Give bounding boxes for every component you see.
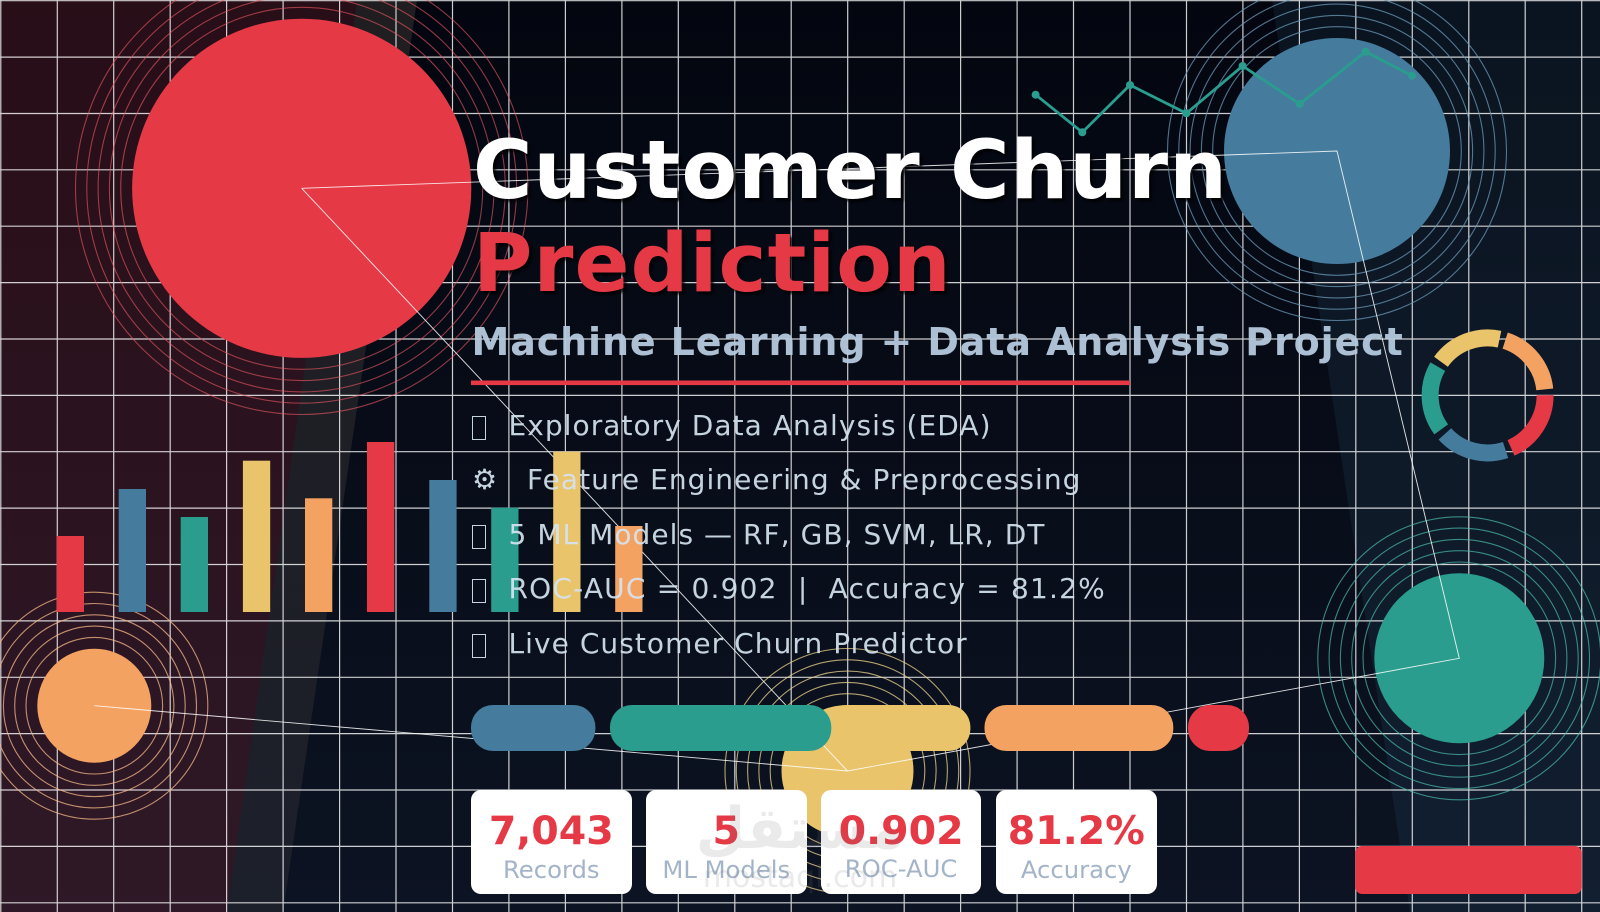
panel: red tinted left background — [0, 0, 357, 912]
list item: predictor: Live Customer Churn Predictor — [508, 627, 968, 660]
line chart — [1032, 48, 1416, 136]
stat card: models: ML Models — [662, 855, 790, 884]
concentric rings: blue — [1168, 0, 1506, 320]
circle: red — [132, 19, 471, 358]
concentric rings: teal — [1318, 517, 1600, 800]
circle: teal — [1374, 573, 1544, 743]
list item: metrics: ROC-AUC = 0.902 | Accuracy = 81.2% — [508, 572, 1106, 605]
stat card: records — [471, 790, 632, 894]
feature list — [472, 409, 1106, 660]
donut chart — [1407, 315, 1568, 476]
stat card: models: 5 — [713, 808, 740, 854]
panel: blue tinted right background — [1272, 0, 1600, 912]
circle: yellow — [782, 705, 914, 837]
title line 2: Prediction — [473, 216, 952, 310]
bar chart — [57, 442, 642, 612]
stat card: records: Records — [503, 855, 600, 884]
concentric rings: yellow — [725, 648, 970, 894]
stat card: models — [646, 790, 807, 894]
stat card: roc-auc — [821, 790, 981, 894]
list item: features: Feature Engineering & Preprocessing — [527, 463, 1082, 496]
circle: orange — [37, 649, 151, 763]
stat card: roc-auc: ROC-AUC — [845, 854, 957, 883]
red block bottom right — [1355, 846, 1582, 894]
stat card: roc-auc: 0.902 — [839, 808, 964, 854]
list item: models: 5 ML Models — RF, GB, SVM, LR, DT — [508, 518, 1045, 551]
panel: warm translucent band — [227, 0, 417, 912]
concentric rings: orange — [0, 592, 208, 819]
concentric rings: red — [76, 0, 528, 414]
stat card: accuracy — [996, 790, 1157, 894]
list item: EDA: Exploratory Data Analysis (EDA) — [508, 409, 992, 442]
circle: blue — [1224, 38, 1450, 264]
list item: features: ⚙ — [472, 463, 498, 496]
title underline — [471, 380, 1130, 385]
subtitle: Machine Learning + Data Analysis Project — [472, 320, 1404, 364]
title line 1: Customer Churn — [473, 124, 1228, 218]
stat card: accuracy: Accuracy — [1021, 855, 1132, 884]
stat card: records: 7,043 — [489, 808, 614, 854]
watermark — [696, 796, 904, 894]
pipeline pills — [471, 705, 1249, 751]
connector lines between circles — [94, 151, 1459, 771]
watermark: مستقل — [696, 796, 904, 862]
watermark: mostaql.com — [703, 860, 897, 894]
stat card: accuracy: 81.2% — [1008, 808, 1145, 854]
